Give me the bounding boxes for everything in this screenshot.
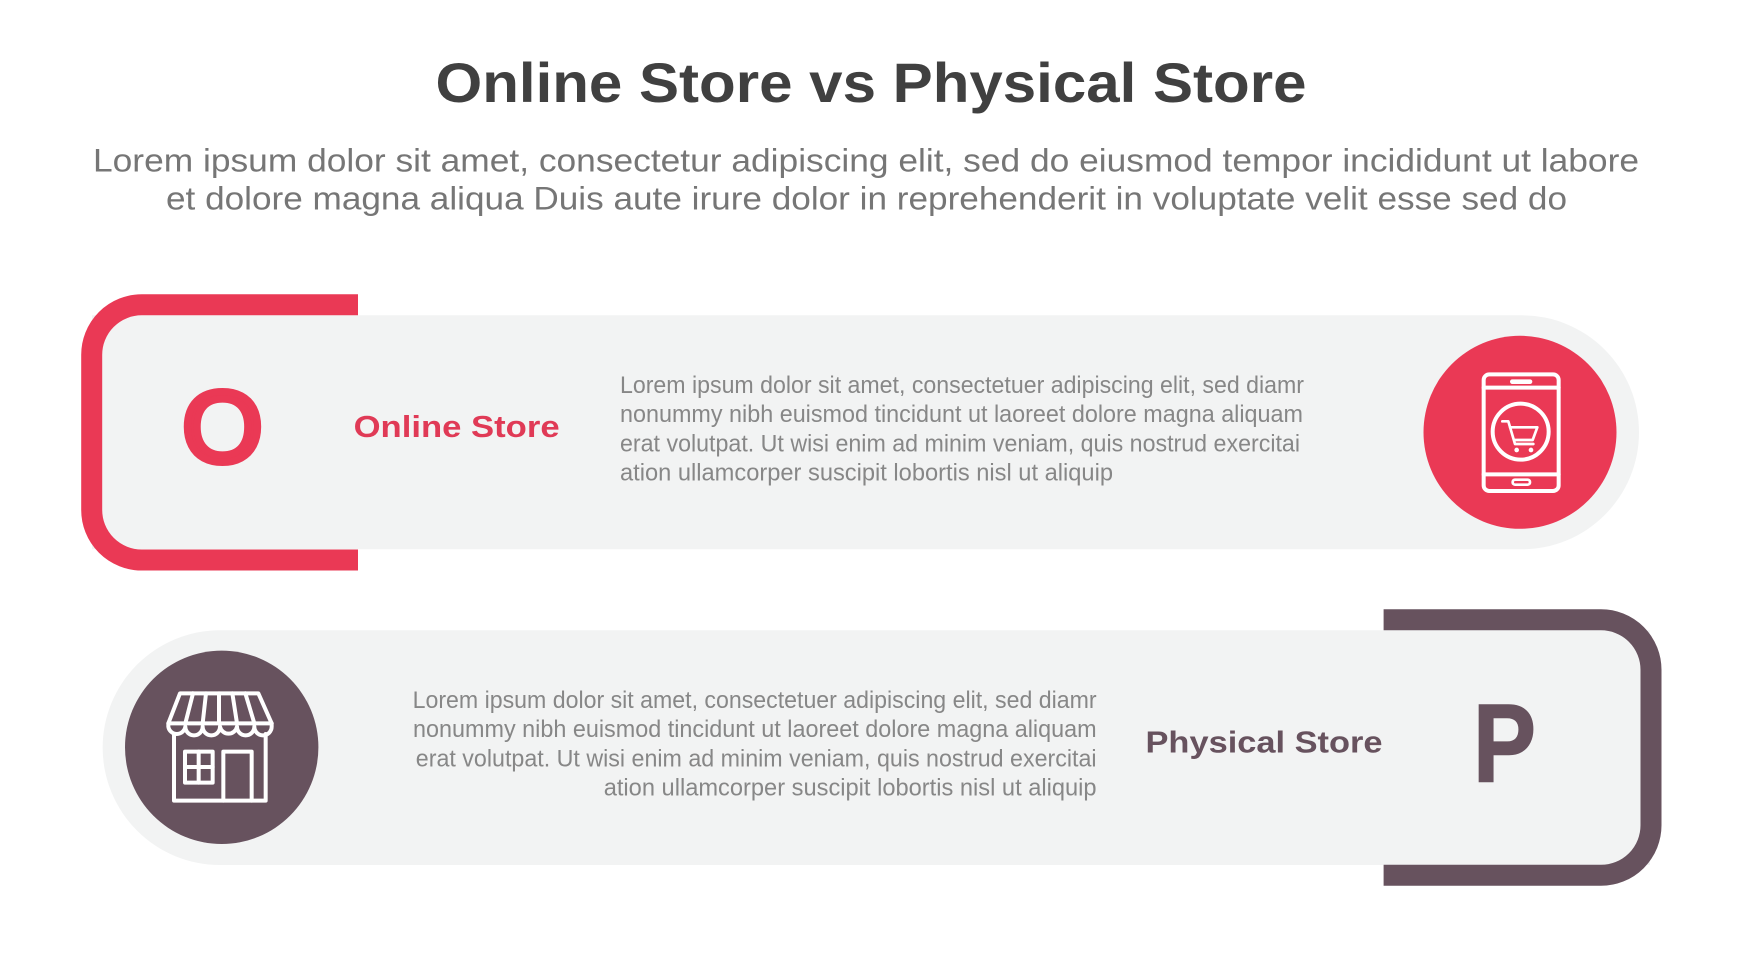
subtitle text block: Lorem ipsum dolor sit amet, consectetur adipiscing elit, sed do eiusmod tempor incididunt ut labore [93,142,1639,178]
body text: online store: nonummy nibh euismod tincidunt ut laoreet dolore magna aliquam [620,401,1303,428]
letter: O: O [182,372,262,484]
panel background: physical store [103,630,1650,865]
body text: online store: ation ullamcorper suscipit lobortis nisl ut aliquip [620,460,1113,487]
subtitle text block [93,142,1639,217]
body text: physical store [413,687,1097,802]
body text: online store [620,372,1304,487]
panel: physical store [103,620,1651,875]
letter: P: P [1473,682,1536,806]
body text: physical store: nonummy nibh euismod tincidunt ut laoreet dolore magna aliquam [413,716,1097,743]
panel: online store [92,305,1639,560]
subtitle text block: et dolore magna aliqua Duis aute irure dolor in reprehenderit in voluptate velit esse sed do [166,181,1567,217]
icon: storefront [125,651,318,844]
body text: online store: Lorem ipsum dolor sit amet, consectetuer adipiscing elit, sed diamr [620,372,1304,399]
body text: physical store: ation ullamcorper suscipit lobortis nisl ut aliquip [604,775,1097,802]
body text: physical store: erat volutpat. Ut wisi enim ad minim veniam, quis nostrud exercitai [416,746,1097,773]
body text: online store: erat volutpat. Ut wisi enim ad minim veniam, quis nostrud exercitai [620,431,1300,458]
bracket: online store [92,305,358,560]
title: Online Store vs Physical Store [436,51,1306,114]
icon: smartphone with shopping cart [1424,336,1616,529]
body text: physical store: Lorem ipsum dolor sit amet, consectetuer adipiscing elit, sed diamr [413,687,1097,714]
heading: physical store: Physical Store [1146,725,1382,760]
heading: online store: Online Store [354,409,560,444]
bracket: physical store [1384,620,1651,875]
panel background: online store [92,315,1639,549]
